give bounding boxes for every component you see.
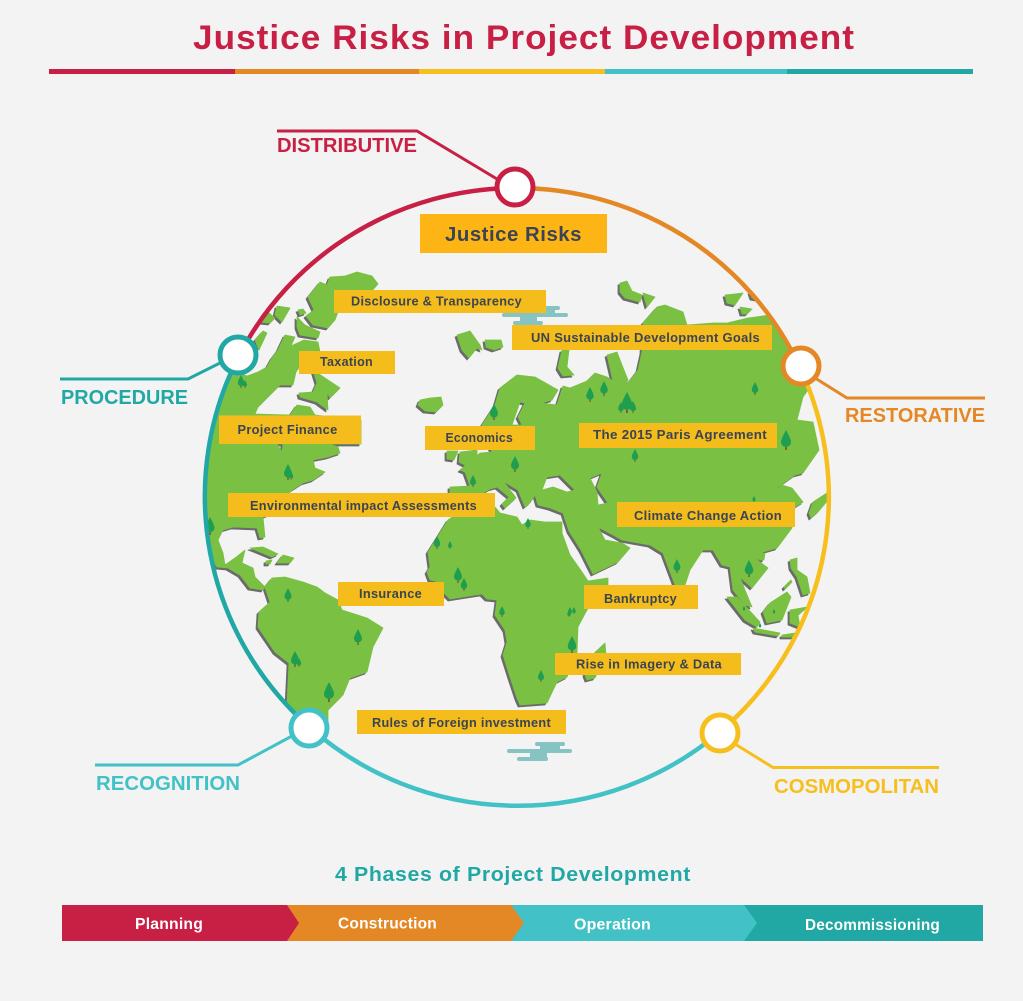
label: Bankruptcy: Bankruptcy xyxy=(604,591,677,606)
label: Rise in Imagery & Data xyxy=(555,653,741,675)
North America xyxy=(195,335,361,590)
phase: Planning xyxy=(62,905,299,941)
Eurasia xyxy=(450,305,819,607)
Philippines xyxy=(790,558,810,595)
callout: Procedure: PROCEDURE xyxy=(61,387,188,409)
label: Insurance xyxy=(338,582,444,606)
Novaya Zemlya xyxy=(558,350,574,376)
callout: Cosmopolitan xyxy=(702,715,939,798)
callout: Cosmopolitan: COSMOPOLITAN xyxy=(774,776,939,798)
label: Project Finance xyxy=(219,416,361,444)
Madagascar xyxy=(585,643,606,680)
Hainan xyxy=(758,553,765,560)
label: Economics: Economics xyxy=(446,430,513,445)
world map xyxy=(195,272,828,735)
title: Justice Risks in Project Development xyxy=(193,19,855,57)
Sumatra xyxy=(727,597,760,627)
label: Insurance: Insurance xyxy=(359,586,422,601)
callout: Distributive: DISTRIBUTIVE xyxy=(277,135,417,157)
Borneo xyxy=(763,592,791,623)
phase: Construction xyxy=(287,905,524,941)
Japan xyxy=(809,493,828,518)
phase: Operation xyxy=(511,905,757,941)
label: Rules of Foreign investment xyxy=(357,710,566,734)
Baffin xyxy=(299,370,340,410)
callout: Restorative: RESTORATIVE xyxy=(845,405,985,427)
callout: Distributive xyxy=(277,131,533,205)
label: UN Sustainable Development Goals xyxy=(512,325,772,350)
label: Disclosure & Transparency: Disclosure & Transparency xyxy=(351,294,522,308)
label: Climate Change Action: Climate Change Action xyxy=(634,508,782,523)
Greenland fragments xyxy=(457,331,482,358)
label: Climate Change Action xyxy=(617,502,795,527)
phase: Decommissioning xyxy=(743,905,983,941)
phase: Decommissioning: Decommissioning xyxy=(805,917,940,934)
phase: Construction: Construction xyxy=(338,916,437,932)
Africa xyxy=(427,505,608,705)
Britain xyxy=(459,450,477,465)
Ellesmere xyxy=(306,272,378,328)
callout: Recognition xyxy=(95,710,327,795)
heading: 4 Phases of Project Development: 4 Phases of Project Development xyxy=(335,864,691,886)
callout: Recognition: RECOGNITION xyxy=(96,773,240,795)
phase: Operation: Operation xyxy=(574,916,651,934)
heading: Justice Risks: Justice Risks xyxy=(445,224,582,246)
South America xyxy=(258,577,383,735)
Sulawesi xyxy=(790,607,807,627)
trees xyxy=(206,375,791,702)
label: Rules of Foreign investment: Rules of Foreign investment xyxy=(372,715,551,730)
Cuba xyxy=(250,547,278,557)
label: Project Finance: Project Finance xyxy=(238,422,338,437)
Ireland xyxy=(447,451,458,460)
label: Environmental impact Assessments xyxy=(228,493,495,517)
Iceland xyxy=(418,397,443,412)
label: The 2015 Paris Agreement xyxy=(579,423,777,448)
label: Taxation: Taxation xyxy=(320,354,373,369)
label: Disclosure & Transparency xyxy=(334,290,546,313)
heading: Justice Risks xyxy=(420,214,607,253)
callout: Restorative xyxy=(783,348,985,427)
label: The 2015 Paris Agreement: The 2015 Paris Agreement xyxy=(593,427,767,442)
phase: Planning: Planning xyxy=(135,916,203,933)
label: Rise in Imagery & Data: Rise in Imagery & Data xyxy=(576,656,722,672)
phases bar xyxy=(62,905,983,941)
Java xyxy=(753,628,780,636)
Arctic Russia islands xyxy=(620,281,642,302)
Arctic islands xyxy=(297,317,320,338)
clouds xyxy=(502,306,572,761)
label: Environmental impact Assessments: Environmental impact Assessments xyxy=(250,498,477,513)
label: Economics xyxy=(425,426,535,450)
label: UN Sustainable Development Goals: UN Sustainable Development Goals xyxy=(531,330,760,345)
label: Taxation xyxy=(299,351,395,374)
title rule: five colour bands xyxy=(49,69,973,74)
callout: Procedure xyxy=(60,337,256,409)
Hispaniola xyxy=(277,555,294,563)
ring: five justice arcs xyxy=(205,188,829,806)
label: Bankruptcy xyxy=(584,585,698,609)
